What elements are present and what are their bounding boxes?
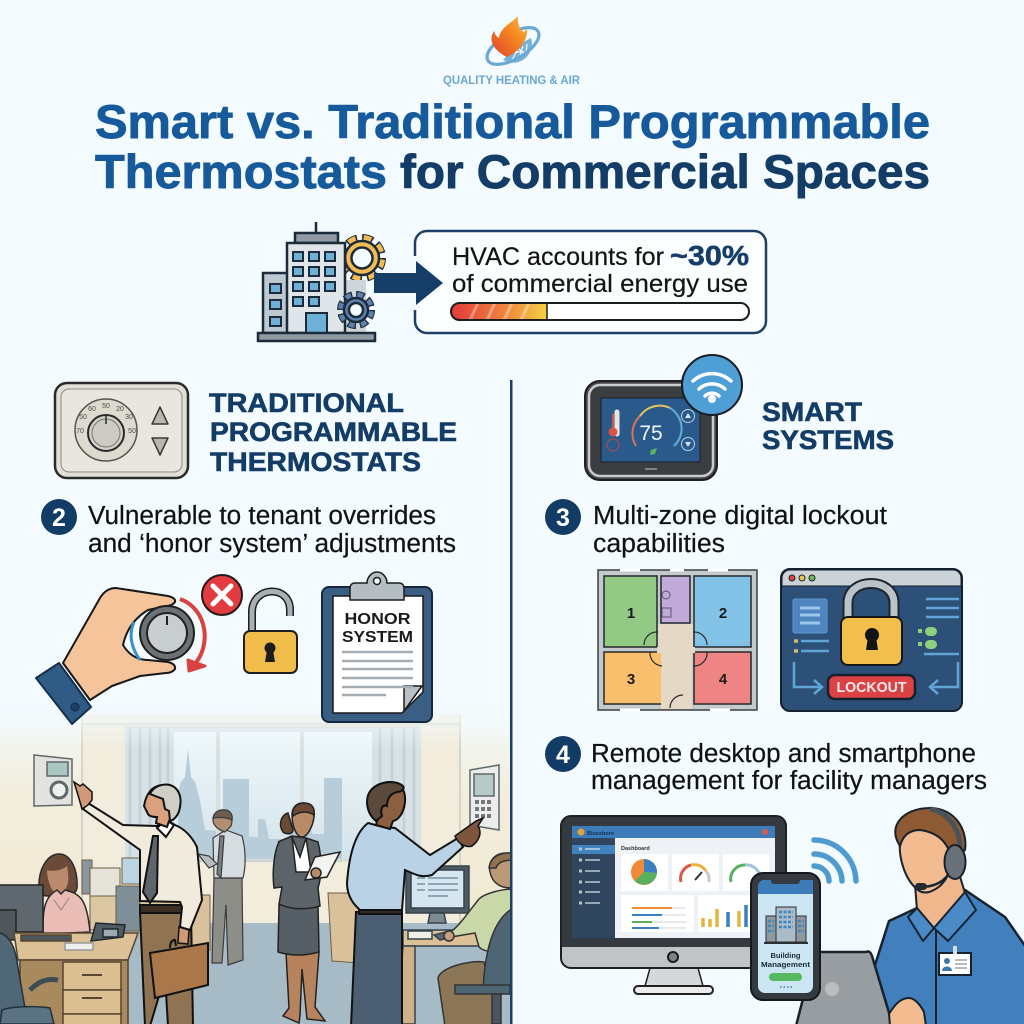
item 2: tenant overrides: 2 (52, 504, 66, 532)
title: Thermostats (95, 145, 387, 198)
top fade (81, 714, 461, 742)
ID badge (939, 953, 971, 975)
neck (914, 876, 965, 926)
arrow to callout (374, 261, 443, 305)
seated man in green shirt (438, 853, 515, 1024)
woman with clipboard (273, 803, 340, 1023)
icon: honor system clipboard (322, 572, 432, 722)
icon: open padlock (244, 591, 297, 673)
heading: traditional: TRADITIONAL (209, 388, 404, 418)
left desk with drawers (14, 933, 138, 1024)
desktop monitor with dashboard: Blueshore (587, 831, 614, 837)
item 4: remote management: Remote desktop and smartphone (591, 740, 976, 768)
icon: traditional thermostat: 50 (128, 428, 136, 435)
icon: traditional thermostat: 30 (125, 414, 133, 421)
callout text: HVAC accounts for (452, 243, 664, 271)
left monitor (0, 885, 43, 940)
callout: HVAC share of energy use (374, 231, 766, 333)
icon: smart thermostat with wifi badge: 75 (639, 422, 663, 445)
typing hand (889, 998, 926, 1024)
item 3: digital lockout (545, 499, 887, 558)
hair (894, 807, 966, 852)
heading: smart systems (762, 397, 894, 455)
office floor (0, 923, 510, 1024)
icon: smart thermostat with wifi badge (585, 355, 742, 480)
man in blue shirt pointing (347, 782, 483, 1024)
desktop monitor with dashboard: Dashboard (621, 846, 650, 852)
icon: commercial building with gears (258, 222, 382, 341)
item 3: digital lockout: capabilities (593, 530, 725, 558)
icon: wifi signal arcs (814, 840, 856, 881)
heading: traditional: PROGRAMMABLE (210, 417, 457, 447)
lockout software window (781, 569, 962, 711)
company name: QUALITY HEATING & AIR (443, 75, 581, 87)
man in white shirt pointing (74, 782, 208, 1024)
icon: traditional thermostat (55, 383, 188, 478)
desktop monitor with dashboard (561, 816, 786, 994)
office wall (0, 734, 510, 954)
floor plan with four zones: 1 (627, 605, 635, 622)
standing man in back (198, 810, 245, 965)
item 3: digital lockout: 3 (556, 504, 570, 532)
smartphone with building management app: Management (761, 960, 811, 969)
headset (930, 809, 960, 851)
collar (908, 892, 976, 941)
icon: flame and snow globe (481, 16, 545, 72)
wall thermostat right (470, 765, 499, 830)
callout: HVAC share of energy use: ~30% (670, 240, 749, 271)
icon: traditional thermostat: 50 (102, 403, 110, 410)
facility manager with laptop (796, 808, 1024, 1024)
item 3: digital lockout: Multi-zone digital lockout (593, 502, 887, 530)
icon: traditional thermostat: 20 (116, 406, 124, 413)
floor plan with four zones: 3 (627, 671, 635, 688)
item 4: remote management (545, 736, 987, 795)
icon: traditional thermostat: 60 (88, 406, 96, 413)
floor plan with four zones (598, 570, 757, 710)
center divider (510, 380, 512, 1024)
smartphone with building management app: Building (770, 951, 801, 960)
icon: honor system clipboard: SYSTEM (342, 629, 413, 646)
icon: traditional thermostat: 50 (79, 414, 87, 421)
item 4: remote management: management for facility managers (591, 767, 987, 795)
logo: Quality Heating & Air (443, 16, 581, 87)
item 2: tenant overrides: Vulnerable to tenant overrides (88, 502, 436, 530)
smartphone with building management app (751, 873, 820, 1000)
item 2: tenant overrides: and ‘honor system’ adjustments (88, 530, 456, 558)
floor plan with four zones: 2 (719, 605, 727, 622)
progress bar 30% (451, 303, 749, 320)
far right desk and monitor (403, 865, 478, 1024)
left office chair (0, 932, 58, 1024)
seated woman at left desk (39, 854, 90, 934)
laptop (796, 952, 893, 1024)
heading: traditional: THERMOSTATS (210, 447, 421, 477)
icon: traditional thermostat: 70 (76, 428, 84, 435)
item 4: remote management: 4 (556, 741, 570, 769)
item 2: tenant overrides (41, 499, 456, 558)
title (95, 95, 930, 198)
icon: honor system clipboard: HONOR (344, 611, 411, 628)
wall thermostat left (34, 755, 72, 806)
floor plan with four zones: 4 (719, 671, 728, 688)
heading: traditional (209, 388, 457, 477)
icon: red X (202, 575, 242, 615)
desk phone (91, 923, 125, 941)
callout: HVAC share of energy use: of commercial energy use (452, 270, 748, 298)
title: for Commercial Spaces (400, 145, 930, 198)
back desks (82, 858, 360, 963)
panel: traditional thermostats office scene (0, 700, 515, 1024)
office window with skyline (82, 714, 460, 924)
heading: smart systems: SMART (762, 397, 862, 427)
lockout software window: LOCKOUT (836, 680, 907, 696)
heading: smart systems: SYSTEMS (762, 425, 894, 455)
shirt (875, 890, 1024, 1024)
icon: hand turning thermostat dial (36, 588, 205, 724)
face (898, 831, 948, 894)
title: Smart vs. Traditional Programmable (95, 95, 930, 148)
